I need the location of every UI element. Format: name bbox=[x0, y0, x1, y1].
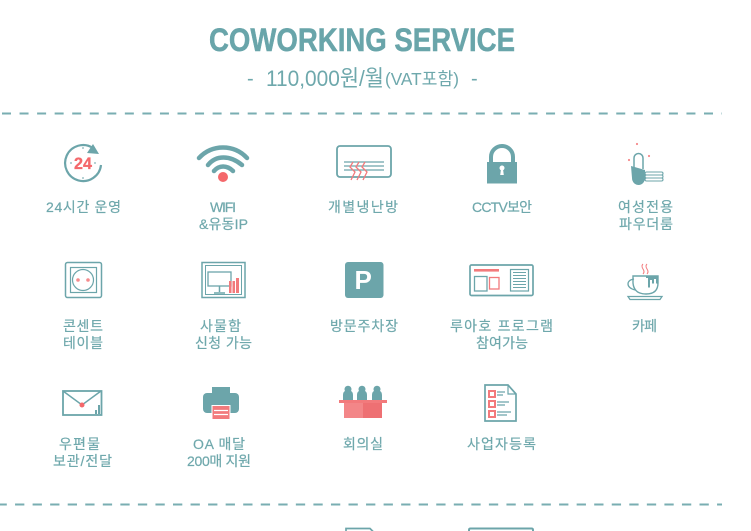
label bbox=[195, 318, 252, 351]
label: OA 매달 bbox=[193, 436, 245, 452]
label bbox=[199, 199, 248, 232]
label: CCTV보안 bbox=[472, 199, 532, 215]
label: 여성전용 bbox=[618, 199, 673, 215]
service: individual air conditioning bbox=[328, 146, 398, 215]
subtitle: price: 110,000원/월 bbox=[266, 66, 384, 91]
icon: checklist document bbox=[485, 385, 516, 421]
service: visitor parking bbox=[330, 262, 398, 334]
subtitle: price: - bbox=[247, 68, 254, 90]
partial icon: board cut off at bottom bbox=[469, 528, 533, 531]
service: CCTV security bbox=[472, 146, 532, 215]
label bbox=[63, 318, 103, 351]
icon: program board bbox=[470, 265, 533, 296]
icon: coffee cup bbox=[628, 264, 662, 300]
service: OA printing bbox=[187, 387, 251, 469]
label: 참여가능 bbox=[476, 335, 528, 351]
label: WIFI bbox=[210, 199, 236, 215]
icon: parking sign: P bbox=[354, 265, 372, 295]
subtitle: price bbox=[247, 66, 478, 91]
label: 200매 지원 bbox=[187, 453, 251, 469]
icon: 24 hour clock: 24 bbox=[74, 155, 93, 173]
label bbox=[450, 318, 553, 351]
label: &유동IP bbox=[199, 216, 248, 232]
label: 사업자등록 bbox=[467, 436, 536, 452]
label: 테이블 bbox=[63, 335, 103, 351]
partial icon: document cut off at bottom bbox=[346, 528, 373, 531]
label: 개별냉난방 bbox=[328, 199, 398, 215]
icon: envelope bbox=[63, 391, 102, 415]
label: 보관/전달 bbox=[53, 453, 112, 469]
subtitle: price: - bbox=[471, 68, 478, 90]
label: 우편물 bbox=[59, 436, 100, 452]
title: COWORKING SERVICE bbox=[209, 22, 515, 58]
label: 카페 bbox=[632, 318, 657, 334]
service: wifi bbox=[199, 148, 248, 232]
label: 루아호 프로그램 bbox=[450, 318, 553, 334]
service: 24 hours bbox=[46, 144, 121, 215]
icon: power socket bbox=[66, 262, 102, 298]
label: 사물함 bbox=[200, 318, 241, 334]
label: 방문주차장 bbox=[330, 318, 398, 334]
icon: powder capsule and compacts bbox=[628, 143, 663, 185]
label bbox=[53, 436, 112, 469]
icon: wifi bbox=[199, 148, 247, 182]
service: meeting room bbox=[339, 386, 387, 452]
label: 파우더룸 bbox=[619, 216, 673, 232]
subtitle: price: (VAT포함) bbox=[385, 69, 459, 89]
icon: air conditioner bbox=[337, 146, 391, 180]
service: program participation bbox=[450, 265, 553, 351]
service: women's powder room bbox=[618, 143, 673, 232]
label bbox=[187, 436, 251, 469]
icon: printer bbox=[203, 387, 239, 420]
service: cafe bbox=[628, 264, 662, 334]
service: mail storage bbox=[53, 391, 112, 469]
service: locker bbox=[195, 262, 252, 351]
icon: padlock bbox=[487, 146, 517, 184]
service: business registration bbox=[467, 385, 536, 452]
label: 회의실 bbox=[343, 436, 383, 452]
label bbox=[618, 199, 673, 232]
icon: people at a table bbox=[339, 386, 387, 418]
icon: locker with monitor bbox=[202, 262, 245, 298]
label: 콘센트 bbox=[63, 318, 103, 334]
label: 신청 가능 bbox=[195, 335, 252, 351]
label: 24시간 운영 bbox=[46, 199, 121, 215]
service: power outlet table bbox=[63, 262, 103, 351]
